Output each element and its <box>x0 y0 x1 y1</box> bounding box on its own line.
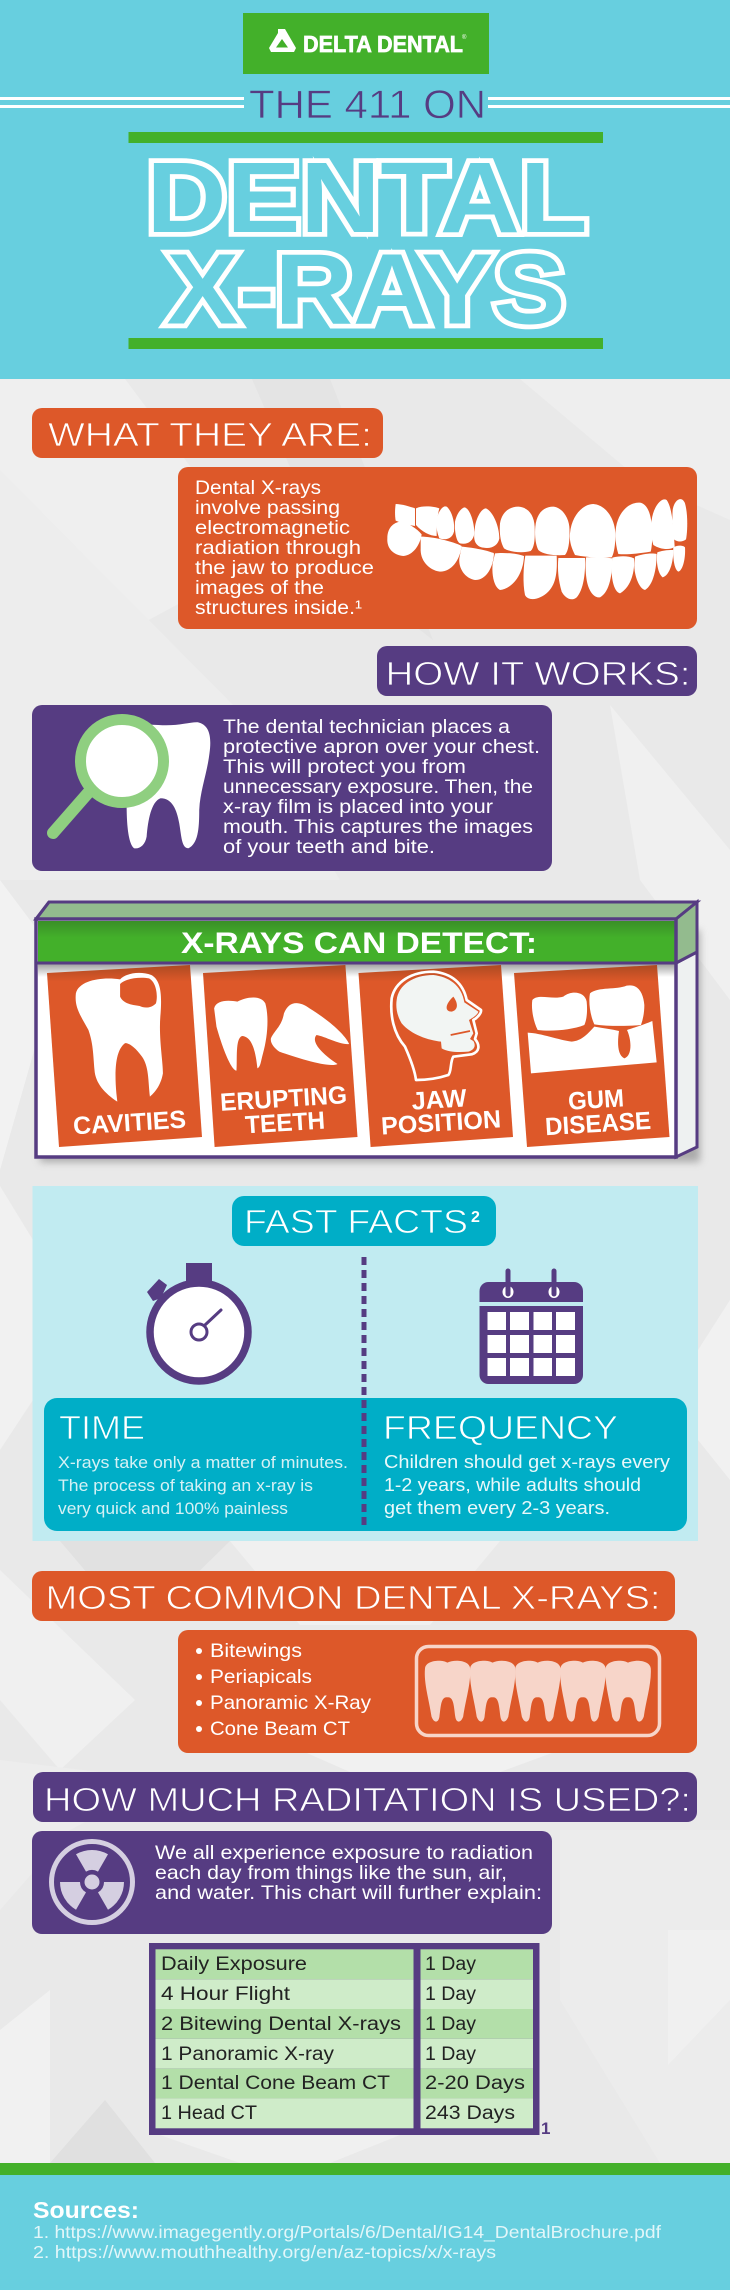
table: radiation comparison: 1 Dental Cone Beam CT <box>161 2073 390 2094</box>
list: x-ray types: Periapicals <box>210 1666 312 1688</box>
card: jaw position: POSITION <box>380 1105 502 1141</box>
heading: fast facts <box>232 1196 496 1246</box>
text block: frequency: get them every 2-3 years. <box>384 1498 610 1518</box>
heading: most common dental x-rays <box>32 1571 675 1621</box>
table: radiation comparison: 1 <box>541 2119 550 2138</box>
text block: definition: structures inside.¹ <box>195 597 363 619</box>
page background with faceted pattern <box>0 379 730 2163</box>
text block: time: very quick and 100% painless <box>58 1500 288 1518</box>
footer band <box>0 2163 730 2290</box>
table: radiation comparison: 2-20 Days <box>425 2073 525 2094</box>
text block: time: TIME <box>59 1409 145 1446</box>
text block: definition: electromagnetic <box>195 517 350 539</box>
text block: time: The process of taking an x-ray is <box>58 1477 313 1495</box>
table: radiation comparison: 2 Bitewing Dental X-rays <box>161 2014 401 2035</box>
card: gum disease <box>514 965 670 1147</box>
heading: fast facts: 2 <box>471 1209 480 1226</box>
text block: radiation exposure: We all experience exposure to radiation <box>155 1842 533 1864</box>
table: radiation comparison: 1 Day <box>425 2014 477 2035</box>
list: x-ray types: Panoramic X-Ray <box>210 1692 371 1714</box>
logo: Delta Dental: DELTA DENTAL <box>303 31 463 57</box>
header band <box>0 0 730 379</box>
text block: frequency: Children should get x-rays every <box>384 1452 670 1472</box>
text block: definition: radiation through <box>195 537 361 559</box>
sources: 2. https://www.mouthhealthy.org/en/az-topics/x/x-rays <box>33 2242 496 2262</box>
text block: procedure: protective apron over your chest. <box>223 736 540 758</box>
card: jaw position <box>358 965 513 1147</box>
text block: frequency: FREQUENCY <box>383 1409 618 1446</box>
sources: 1. https://www.imagegently.org/Portals/6/Dental/IG14_DentalBrochure.pdf <box>33 2222 661 2243</box>
card: erupting teeth: ERUPTING <box>219 1081 348 1117</box>
teal facts box <box>44 1398 687 1531</box>
icon: x-ray film of teeth <box>416 1646 660 1736</box>
text block: procedure: This will protect you from <box>223 756 466 778</box>
panel: x-ray types <box>178 1630 697 1753</box>
heading: how much radiation: HOW MUCH RADITATION IS USED?: <box>44 1781 691 1818</box>
text block: time: X-rays take only a matter of minutes. <box>58 1454 348 1472</box>
text block: time <box>58 1409 348 1518</box>
icon: stopwatch <box>147 1263 248 1381</box>
text block: frequency <box>383 1409 670 1518</box>
table: radiation comparison: 4 Hour Flight <box>161 1984 291 2005</box>
card: erupting teeth: TEETH <box>244 1107 326 1139</box>
card: gum disease: DISEASE <box>544 1107 652 1141</box>
panel: fast facts <box>32 1186 698 1541</box>
heading: most common dental x-rays: MOST COMMON DENTAL X-RAYS: <box>46 1579 660 1616</box>
title: Dental X-Rays: X-RAYS <box>166 234 566 346</box>
list: x-ray types: Cone Beam CT <box>210 1718 350 1740</box>
text block: procedure: mouth. This captures the images <box>223 816 533 838</box>
card: erupting teeth <box>203 965 358 1147</box>
text block: procedure: unnecessary exposure. Then, the <box>223 776 533 798</box>
dashed divider <box>362 1257 366 1528</box>
text block: procedure: of your teeth and bite. <box>223 836 435 858</box>
card: cavities: CAVITIES <box>72 1106 187 1140</box>
green banner: x-rays can detect <box>38 921 675 962</box>
text block: definition: images of the <box>195 577 324 599</box>
logo: Delta Dental <box>243 13 489 74</box>
table: radiation comparison: 243 Days <box>425 2103 515 2124</box>
text block: procedure: The dental technician places a <box>223 716 510 738</box>
card: gum disease: GUM <box>567 1084 625 1116</box>
table: radiation comparison: 1 Panoramic X-ray <box>161 2044 335 2065</box>
panel: x-rays can detect <box>36 902 700 1162</box>
panel: radiation explanation <box>32 1831 552 1934</box>
title: Dental X-Rays <box>128 132 603 349</box>
decorative side lines with heading: the 411 on <box>0 83 730 127</box>
title: Dental X-Rays: X-RAYS <box>166 234 566 346</box>
text block: procedure <box>223 716 540 858</box>
sources: Sources: <box>33 2197 139 2223</box>
heading: how much radiation <box>33 1772 697 1822</box>
table: radiation comparison: 1 Day <box>425 1984 477 2005</box>
text block: definition: involve passing <box>195 497 340 519</box>
text block: frequency: 1-2 years, while adults should <box>384 1475 641 1495</box>
text block: radiation exposure: and water. This chart will further explain: <box>155 1882 542 1904</box>
table: radiation comparison: 1 Day <box>425 2044 477 2065</box>
table: radiation comparison: 1 Day <box>425 1954 477 1975</box>
heading: how it works <box>377 646 697 696</box>
icon: tooth with magnifier <box>53 720 210 848</box>
sources <box>33 2197 661 2262</box>
text block: radiation exposure <box>155 1842 542 1904</box>
panel: what they are <box>178 467 697 629</box>
text block: definition: the jaw to produce <box>195 557 374 579</box>
text block: procedure: x-ray film is placed into your <box>223 796 494 818</box>
icon: teeth <box>387 499 687 599</box>
list: x-ray types <box>196 1640 371 1740</box>
list: x-ray types: Bitewings <box>210 1640 302 1662</box>
card: cavities <box>47 965 202 1147</box>
heading: how it works: HOW IT WORKS: <box>386 655 690 692</box>
table: radiation comparison: 1 Head CT <box>161 2103 257 2124</box>
card: jaw position: JAW <box>411 1084 468 1116</box>
text block: definition <box>195 477 374 619</box>
panel: how it works <box>32 705 552 871</box>
table: radiation comparison: Daily Exposure <box>161 1954 307 1975</box>
heading: what they are <box>32 408 383 458</box>
heading: fast facts: FAST FACTS <box>244 1203 468 1240</box>
title: Dental X-Rays: DENTAL <box>146 142 588 254</box>
title: Dental X-Rays: DENTAL <box>146 142 588 254</box>
logo: Delta Dental: ® <box>462 34 467 41</box>
icon: calendar <box>480 1271 583 1384</box>
green banner: x-rays can detect: X-RAYS CAN DETECT: <box>181 927 537 960</box>
text block: radiation exposure: each day from things like the sun, air, <box>155 1862 507 1884</box>
decorative side lines with heading: the 411 on: THE 411 ON <box>249 83 486 127</box>
heading: what they are: WHAT THEY ARE: <box>48 416 372 453</box>
text block: definition: Dental X-rays <box>195 477 321 499</box>
icon: radiation symbol <box>52 1842 132 1922</box>
table: radiation comparison <box>149 1943 550 2138</box>
